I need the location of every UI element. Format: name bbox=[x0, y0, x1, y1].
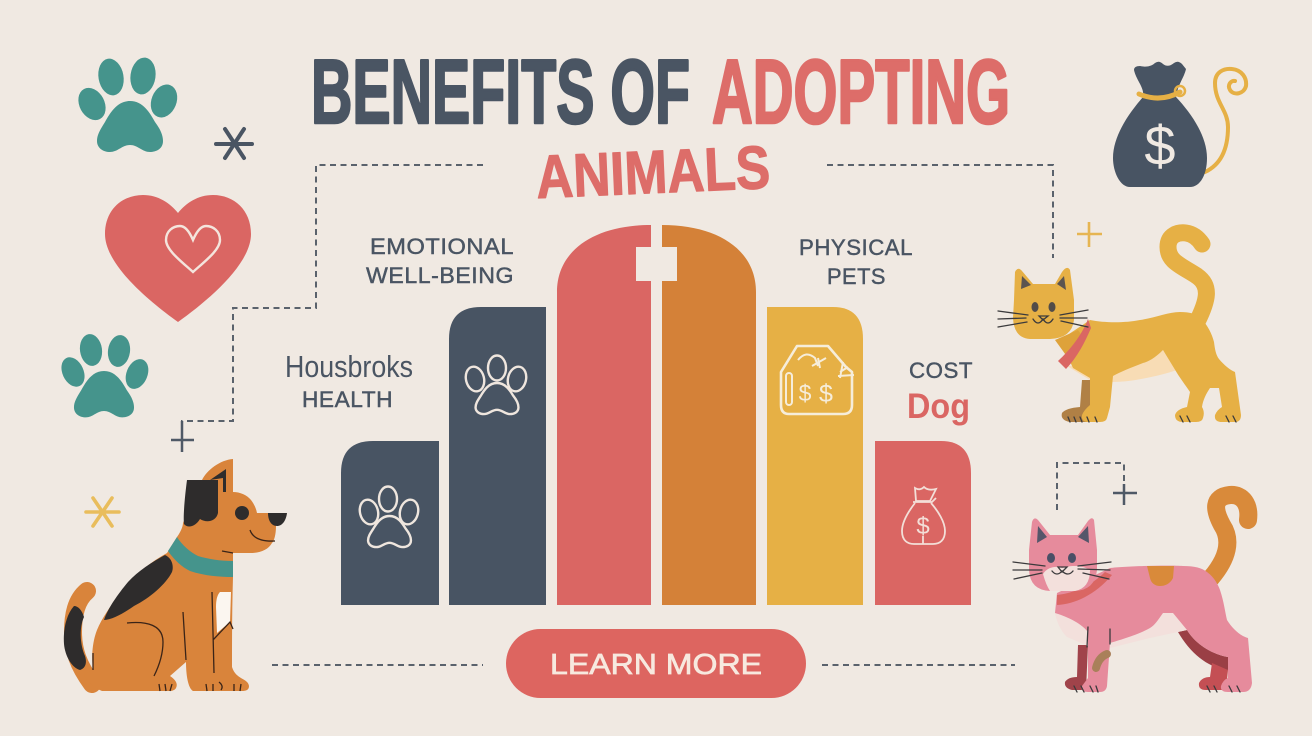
bar chart bbox=[341, 225, 971, 605]
illustration: pink cat bbox=[1013, 495, 1252, 692]
pink cat face lines bbox=[1013, 562, 1240, 692]
pink cat muzzle bbox=[1043, 566, 1090, 591]
icon: money bag with tail: $ bbox=[1144, 114, 1176, 177]
pink cat leg spot bbox=[1096, 654, 1107, 668]
yellow cat neck shade bbox=[1055, 330, 1085, 358]
dog tail bbox=[73, 591, 92, 684]
yellow cat back paw bbox=[1062, 380, 1092, 422]
title: ADOPTING bbox=[712, 42, 1010, 143]
icon: outline paw in bar 1 bbox=[357, 486, 421, 547]
pink cat far rear leg bbox=[1178, 630, 1228, 670]
label: emotional well-being bbox=[366, 234, 514, 288]
illustration: yellow cat bbox=[998, 233, 1241, 422]
pink cat body bbox=[1055, 566, 1252, 692]
yellow cat belly bbox=[1067, 350, 1177, 382]
icon: yellow plus bbox=[1077, 222, 1102, 247]
illustration: dog bbox=[64, 459, 287, 691]
bar: centre right bbox=[662, 225, 756, 605]
yellow cat body bbox=[1060, 312, 1241, 422]
yellow cat collar bbox=[1058, 319, 1091, 369]
dog nose bbox=[268, 513, 287, 526]
label: emotional well-being: WELL-BEING bbox=[366, 263, 514, 288]
dashed connector: pink cat bbox=[1057, 463, 1124, 510]
icon: outline paw in bar 2 bbox=[463, 356, 529, 414]
yellow cat face lines bbox=[998, 310, 1236, 422]
dashed connector: bottom right bbox=[822, 664, 1015, 666]
icon: heart bbox=[105, 195, 251, 322]
label: physical pets: PETS bbox=[827, 264, 886, 289]
label: housbroks health: HEALTH bbox=[302, 387, 393, 412]
dog eye bbox=[235, 506, 249, 520]
bar: physical pets bbox=[767, 307, 863, 605]
pink cat far rear paw bbox=[1199, 663, 1228, 690]
button: learn more bbox=[506, 629, 806, 698]
pink cat ears bbox=[1037, 526, 1089, 543]
title: BENEFITS OF bbox=[311, 42, 690, 143]
yellow cat eyes bbox=[1032, 302, 1056, 312]
label: emotional well-being: EMOTIONAL bbox=[370, 234, 514, 259]
pink cat orange patch bbox=[1147, 566, 1174, 586]
icon: plus left bbox=[171, 421, 194, 452]
pink cat far front leg bbox=[1065, 645, 1088, 690]
label: cost dog: COST bbox=[909, 358, 973, 383]
label: housbroks health bbox=[285, 349, 413, 412]
title: ANIMALS bbox=[535, 133, 771, 211]
icon: outline money bag in bar bbox=[902, 487, 945, 544]
dog ear bbox=[184, 469, 226, 526]
pink cat eyes bbox=[1047, 553, 1076, 563]
icon: tag with dollars: $ bbox=[819, 380, 833, 408]
dog line details bbox=[93, 530, 275, 691]
button: learn more: LEARN MORE bbox=[550, 649, 762, 681]
icon: money bag with tail bbox=[1113, 62, 1246, 187]
dashed connector: top right bbox=[827, 165, 1053, 258]
dog saddle bbox=[104, 555, 173, 620]
label: physical pets bbox=[799, 235, 913, 289]
yellow cat ears bbox=[1021, 276, 1066, 290]
dashed connector: bottom left bbox=[272, 664, 483, 666]
dog body bbox=[84, 459, 276, 691]
bar: health bbox=[341, 441, 439, 605]
pink cat belly left bbox=[1055, 613, 1088, 646]
icon: teal paw bottom bbox=[57, 333, 153, 417]
icon: plus right bbox=[1113, 484, 1137, 505]
pink cat head bbox=[1029, 518, 1097, 591]
label: cost dog bbox=[907, 358, 973, 426]
pink cat tail bbox=[1211, 495, 1248, 578]
dashed connector: top left bbox=[182, 165, 483, 432]
icon: tag with dollars: $ bbox=[799, 380, 812, 406]
dog collar bbox=[168, 537, 233, 577]
dog chest bbox=[216, 592, 231, 633]
label: housbroks health: Housbroks bbox=[285, 349, 413, 384]
label: physical pets: PHYSICAL bbox=[799, 235, 913, 260]
yellow cat head bbox=[1013, 268, 1074, 339]
icon: yellow asterisk bbox=[86, 498, 119, 526]
bar: centre left bbox=[557, 225, 651, 605]
pink cat belly right bbox=[1110, 613, 1187, 648]
bar: cost bbox=[875, 441, 971, 605]
icon: tag with dollars bbox=[781, 346, 854, 414]
yellow cat tail bbox=[1168, 233, 1206, 322]
icon: dark asterisk bbox=[216, 129, 252, 158]
icon: outline money bag in bar: $ bbox=[916, 513, 930, 540]
label: cost dog: Dog bbox=[907, 387, 970, 426]
pink cat collar bbox=[1057, 572, 1112, 605]
bar: emotional well-being bbox=[449, 307, 546, 605]
dog tail black band bbox=[64, 606, 86, 670]
icon: teal paw top bbox=[73, 56, 182, 152]
title bbox=[311, 42, 1010, 211]
